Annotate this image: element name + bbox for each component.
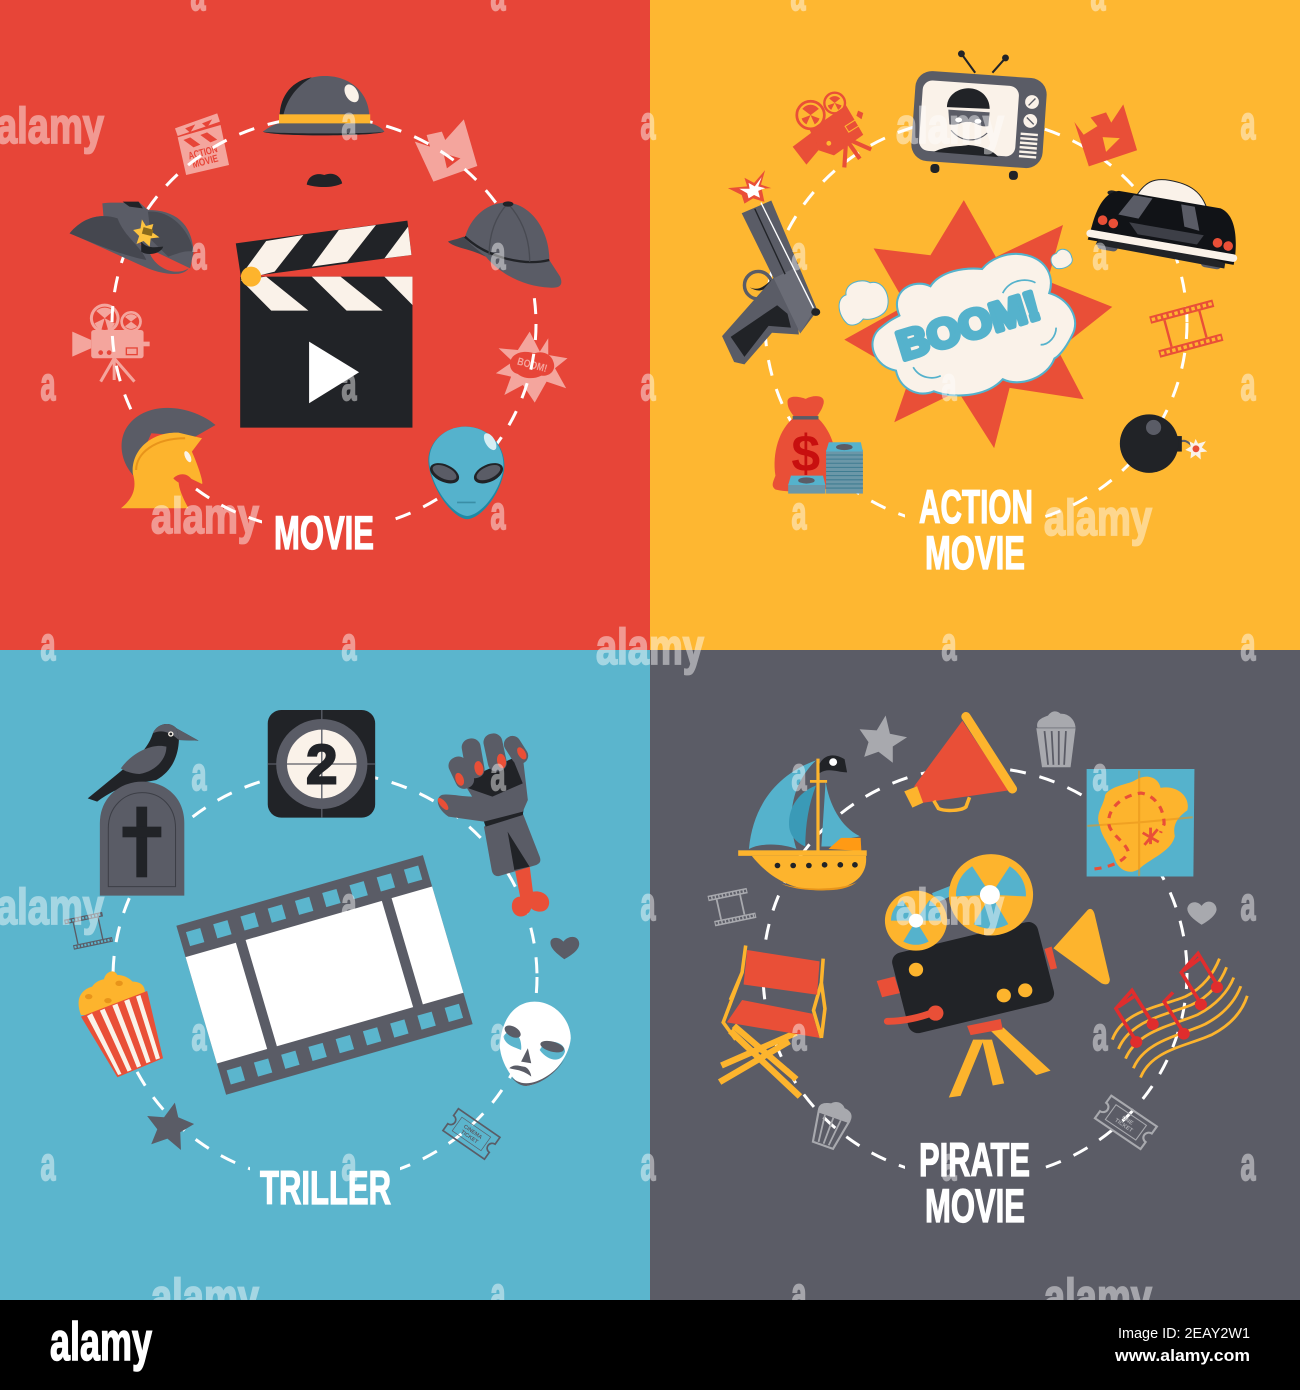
icon: faded boom burst: BOOM!: [516, 356, 548, 375]
icon: tilted popcorn: [806, 1097, 855, 1151]
icon: star: [147, 1103, 194, 1150]
icon: ticket: TICKET: [459, 1129, 479, 1146]
watermarks: alamy: [1044, 490, 1152, 546]
icon: tombstone: [100, 782, 184, 896]
watermarks: a: [192, 226, 207, 279]
icon: white mask: [500, 1002, 571, 1086]
watermarks: a: [640, 96, 656, 149]
icon: moustache: [307, 174, 342, 187]
watermarks: a: [1240, 96, 1256, 149]
watermarks: a: [792, 226, 807, 279]
watermarks: a: [490, 1267, 506, 1320]
icon: clapperboard: [236, 221, 412, 428]
icon: ticket: [443, 1109, 500, 1159]
icon: action movie clapper: MOVIE: [191, 154, 220, 171]
watermarks: a: [342, 96, 357, 149]
watermarks: a: [342, 877, 357, 930]
watermarks: a: [342, 1137, 357, 1190]
icon: popcorn box: [1036, 711, 1076, 767]
watermarks: a: [792, 1267, 807, 1320]
watermarks: a: [1092, 747, 1108, 800]
icon: ticket: ONE: [1120, 1115, 1134, 1127]
title: action movie: MOVIE: [925, 526, 1025, 579]
title: action movie: [919, 480, 1033, 579]
icon: deerstalker cap: [448, 201, 561, 288]
image id: Image ID: 2EAY2W1: [1118, 1325, 1250, 1342]
watermarks: a: [192, 747, 207, 800]
icon: pirate ship: [738, 755, 867, 890]
watermarks: a: [342, 357, 357, 410]
watermarks: alamy: [1044, 1269, 1152, 1325]
watermarks: a: [40, 1137, 56, 1190]
watermarks: a: [192, 1007, 207, 1060]
title: pirate movie: [919, 1133, 1030, 1232]
icon: red projector: [793, 93, 871, 167]
icon: music notes: [1112, 953, 1247, 1078]
watermarks: a: [1092, 226, 1108, 279]
watermarks: a: [942, 357, 957, 410]
watermarks: alamy: [151, 1269, 259, 1325]
watermarks: a: [1092, 1007, 1108, 1060]
icon: spartan helmet: [121, 408, 216, 508]
icons: action panel: [722, 50, 1248, 494]
watermarks: alamy: [896, 879, 1004, 935]
icon: boom burst: [839, 200, 1112, 448]
icon: action movie clapper: ACTION: [187, 144, 219, 162]
icon: countdown clock: 2: [306, 733, 338, 795]
icon: money bag: [773, 396, 863, 494]
icon: faded projector: [72, 304, 150, 382]
icon: crow: [88, 724, 198, 802]
title: movie: MOVIE: [274, 506, 374, 559]
watermarks: a: [942, 617, 957, 670]
icon: director chair: [720, 945, 825, 1097]
icon: star: [860, 716, 907, 763]
panel: action movie: [650, 0, 1300, 650]
watermarks: a: [1240, 617, 1256, 670]
watermarks: a: [490, 747, 506, 800]
solid icons: pirate panel: [720, 717, 1247, 1098]
icon: ticket: TICKET: [1113, 1118, 1134, 1134]
icon: action movie clapper: [175, 113, 229, 175]
icon: faded boom burst: [496, 332, 568, 403]
faded icons: pirate panel: [707, 711, 1217, 927]
icon: zombie hand: [436, 732, 549, 916]
icon: muscle car: [1084, 168, 1248, 272]
icon: money bag: $: [791, 424, 820, 482]
watermarks: a: [1240, 1137, 1256, 1190]
watermarks: a: [792, 1007, 807, 1060]
watermarks: alamy: [0, 98, 104, 154]
icon: ticket: [1095, 1096, 1157, 1149]
icon: popcorn: [79, 971, 163, 1077]
panel: movie: [0, 0, 650, 650]
faded icons: movie panel: [72, 113, 568, 403]
icon: alien head: [427, 427, 506, 519]
watermarks: a: [1240, 357, 1256, 410]
icon: retro tv: [910, 50, 1048, 180]
faded icons: lower pirate panel: [806, 1096, 1157, 1151]
watermarks: a: [342, 617, 357, 670]
faded icon: small film strip: [64, 911, 113, 950]
icon: bowler hat: [263, 76, 384, 135]
logo: alamy: alamy: [50, 1312, 152, 1372]
bottom bar: [0, 1300, 1300, 1390]
watermarks: alamy: [896, 98, 1004, 154]
title: action movie: ACTION: [919, 480, 1033, 533]
watermarks: a: [490, 486, 506, 539]
icon: ticket: CINEMA: [462, 1124, 483, 1141]
watermarks: a: [490, 1007, 506, 1060]
icon: red clapper: [1074, 104, 1137, 166]
icon: faded clapper: [415, 119, 477, 182]
title: pirate movie: MOVIE: [925, 1179, 1025, 1232]
icon: heart: [550, 937, 579, 959]
solid icons: movie panel: [70, 76, 561, 519]
icon: red film strip: [1149, 300, 1223, 358]
icon: film strip: [176, 855, 473, 1095]
watermarks: a: [640, 1137, 656, 1190]
icon: heart: [1187, 902, 1217, 925]
icon: boom burst: BOOM!: [892, 282, 1045, 369]
watermarks: a: [40, 617, 56, 670]
watermarks: a: [640, 877, 656, 930]
site url: www.alamy.com: [1114, 1346, 1250, 1365]
watermarks: a: [40, 357, 56, 410]
icon: film projector: [877, 854, 1110, 1098]
watermarks: alamy: [596, 619, 704, 675]
title: triller: TRILLER: [260, 1161, 391, 1214]
watermarks: alamy: [0, 879, 104, 935]
icon: bomb: [1120, 414, 1207, 473]
icon: treasure map: [1087, 769, 1194, 877]
watermarks: a: [490, 226, 506, 279]
icon: pistol: [722, 170, 820, 364]
icon: small film strip: [707, 887, 756, 927]
icon: megaphone: [904, 717, 1012, 810]
icons: triller panel: [79, 710, 579, 1159]
watermarks: a: [792, 747, 807, 800]
title: pirate movie: PIRATE: [919, 1133, 1030, 1186]
icon: sheriff hat: [70, 202, 194, 274]
watermarks: a: [942, 1137, 957, 1190]
watermarks: alamy: [151, 488, 259, 544]
icon: countdown clock: [268, 710, 375, 818]
watermarks: a: [1240, 877, 1256, 930]
panel: triller: [0, 650, 650, 1300]
panel: pirate movie: [650, 650, 1300, 1300]
watermarks: a: [640, 357, 656, 410]
watermarks: a: [792, 486, 807, 539]
